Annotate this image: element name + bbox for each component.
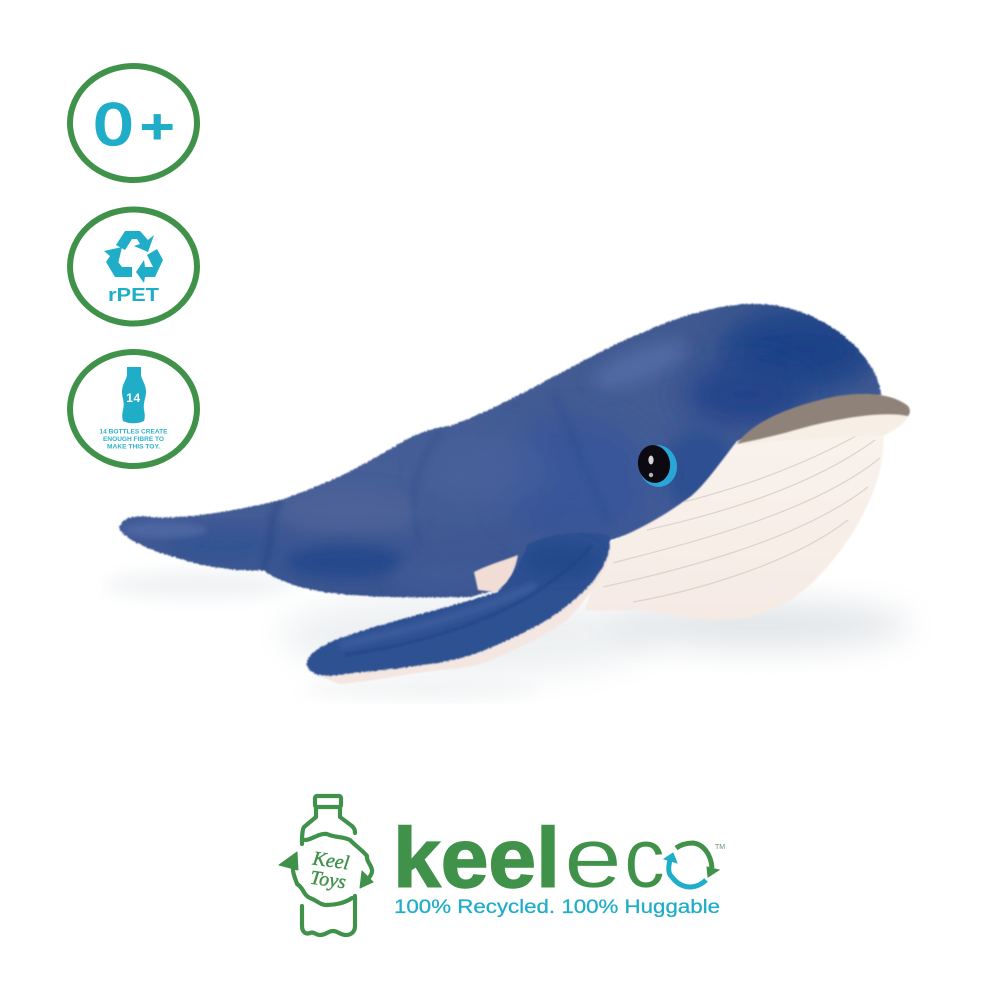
whale eye <box>635 442 680 490</box>
wordmark: Keel Toys: Toys <box>309 867 348 893</box>
caption: 14 bottles <box>100 428 168 450</box>
whale flipper <box>307 532 612 684</box>
tagline: 100% Recycled. 100% Huggable <box>394 897 720 918</box>
wordmark: c: c <box>624 811 665 906</box>
icon: recycling arrows <box>104 231 163 283</box>
icon: recycled bottle <box>279 796 373 935</box>
wordmark: recycling o <box>664 843 719 887</box>
age badge: 0+ <box>70 66 197 180</box>
caption: 14 bottles: ENOUGH FIBRE TO <box>103 436 164 443</box>
wordmark: Keel Toys <box>309 847 351 893</box>
bottles badge <box>70 352 197 466</box>
wordmark: keel: keel <box>393 811 560 905</box>
wordmark: e: e <box>564 811 622 906</box>
wordmark: Keel Toys: Keel <box>310 847 351 875</box>
trademark: TM <box>715 844 725 851</box>
rPET recycling badge <box>70 210 197 324</box>
icon: bottle with 14: 14 <box>126 391 141 405</box>
caption: 14 bottles: MAKE THIS TOY. <box>107 444 160 450</box>
whale flank patch <box>474 555 518 592</box>
whale belly <box>585 420 884 620</box>
keeleco logo <box>279 796 725 935</box>
age badge: 0+: 0 <box>92 94 134 158</box>
product infographic <box>67 63 911 938</box>
caption: 14 bottles: 14 BOTTLES CREATE <box>100 428 168 436</box>
age badge: 0+: + <box>139 105 175 147</box>
whale lip <box>737 394 910 446</box>
plush whale <box>119 304 910 684</box>
whale body <box>119 304 881 597</box>
floor shadow <box>105 571 910 698</box>
label: rPET: rPET <box>108 285 159 305</box>
